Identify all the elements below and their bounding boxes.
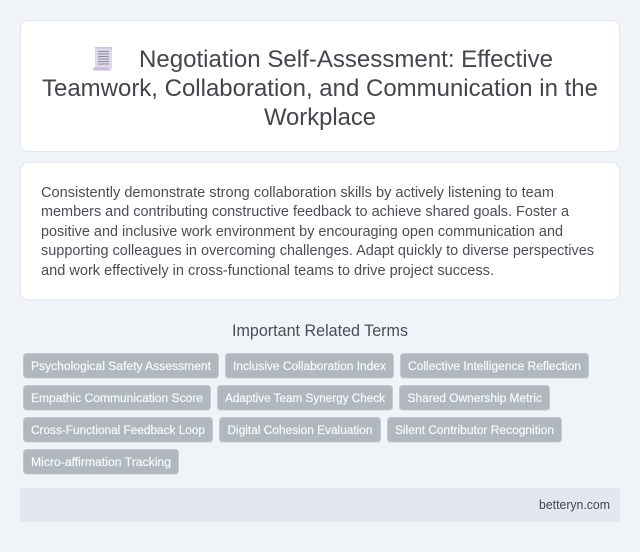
tag: Micro-affirmation Tracking [31, 455, 171, 469]
tag: Inclusive Collaboration Index [233, 359, 387, 373]
footer [20, 488, 620, 522]
tag: Silent Contributor Recognition [395, 423, 554, 437]
tag: Empathic Communication Score [31, 391, 203, 405]
panel: summary paragraph: supporting colleagues in overcoming challenges. Adapt quickly to diverse perspectives [41, 242, 594, 259]
title [42, 46, 598, 131]
tag: Digital Cohesion Evaluation [228, 423, 373, 437]
tag [400, 386, 550, 410]
tag [24, 386, 210, 410]
tag: Collective Intelligence Reflection [408, 359, 581, 373]
panel: summary paragraph: Consistently demonstrate strong collaboration skills by actively listening to team [41, 184, 554, 201]
title: Teamwork, Collaboration, and Communication in the [42, 75, 598, 102]
panel: summary paragraph: positive and inclusive work environment by encouraging open communication and [41, 223, 563, 240]
tag [388, 418, 562, 442]
title: Negotiation Self-Assessment: Effective [139, 46, 553, 73]
tag: Adaptive Team Synergy Check [225, 391, 386, 405]
panel: summary paragraph: members and contributing constructive feedback to achieve shared goals. Foster a [41, 203, 570, 220]
tag [24, 450, 178, 474]
panel: summary paragraph: and work effectively in cross-functional teams to drive project success. [41, 262, 494, 279]
footer: betteryn.com [539, 497, 610, 512]
panel: related term tags [24, 354, 588, 474]
title: Workplace [264, 104, 376, 131]
tag: Shared Ownership Metric [408, 391, 542, 405]
tag: Cross-Functional Feedback Loop [31, 423, 205, 437]
tag [24, 418, 212, 442]
panel: title header [20, 20, 620, 152]
tag [24, 354, 218, 378]
tag [400, 354, 588, 378]
tag: Psychological Safety Assessment [31, 359, 212, 373]
panel: summary paragraph [20, 162, 620, 300]
tag [220, 418, 380, 442]
icon: scroll document [93, 47, 112, 70]
tag [226, 354, 394, 378]
heading: important related terms: Important Related Terms [232, 322, 408, 340]
tag [218, 386, 392, 410]
